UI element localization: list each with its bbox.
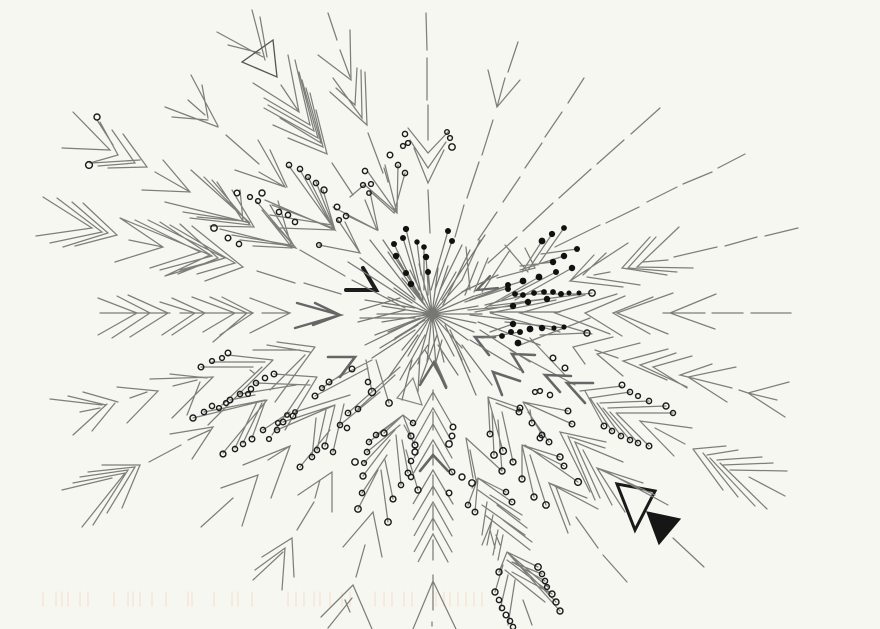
outline triangle lower centre bbox=[397, 378, 422, 405]
spoke: top-left with triangle bbox=[217, 10, 277, 77]
spoke: right lower chevrons bbox=[510, 318, 789, 417]
spoke: lower left chevrons bbox=[201, 446, 382, 629]
spoke: upper left feather bbox=[253, 55, 327, 154]
filled black triangle bbox=[647, 512, 680, 544]
spoke: chevron right of circles bbox=[640, 421, 692, 456]
lower ring bbox=[388, 325, 476, 400]
outline triangle bbox=[242, 40, 277, 77]
dark dots: upper centre bbox=[391, 226, 455, 287]
spoke: bottom right long feather bbox=[468, 478, 560, 625]
spoke: feather with circles, upper bbox=[235, 140, 405, 253]
faint ghost marks along bottom bbox=[43, 592, 482, 606]
spoke: left horizontal bbox=[98, 295, 290, 342]
spoke: right feather with dark dots bbox=[462, 228, 592, 312]
right ring bbox=[462, 275, 565, 385]
dark dots: right lower bbox=[499, 321, 567, 346]
outline black triangle bbox=[617, 484, 655, 530]
open circles: lower centre bbox=[405, 420, 465, 496]
left ring bbox=[358, 298, 425, 358]
spoke: far left chevrons bbox=[36, 197, 117, 247]
spoke: lower right feather with circles bbox=[580, 386, 673, 446]
bold gray chevron right upper bbox=[477, 276, 498, 290]
dashed ray 4 bbox=[555, 154, 745, 247]
tail line and dashes of lower right ray bbox=[576, 517, 704, 582]
dashed ray 5 with chevrons bbox=[570, 227, 798, 287]
dashed ray 3 bbox=[488, 108, 660, 263]
bold gray double arrow bbox=[295, 303, 340, 328]
open circles: bottom feather bbox=[492, 564, 563, 629]
spoke: lower middle feathers with circles bbox=[263, 360, 418, 522]
radial rays bbox=[377, 264, 482, 366]
bold gray chevron lower left bbox=[328, 357, 355, 377]
bold gray chevron lower centre bbox=[420, 455, 448, 471]
spoke: wide left feather bbox=[115, 218, 341, 294]
bold gray chevrons right bbox=[475, 337, 593, 403]
spoke: vertical top with chevrons bbox=[408, 13, 448, 233]
spoke: lower left dense feathers bbox=[193, 342, 317, 453]
lower bold arrow bbox=[420, 362, 446, 388]
spoke: small chevron left bbox=[165, 75, 259, 164]
spoke: right horizontal bbox=[490, 293, 791, 336]
spoke: far right lower feather bbox=[693, 446, 787, 509]
spoke: lower right mid feathers bbox=[466, 397, 668, 533]
spoke: feather towards circles, left bbox=[142, 160, 345, 276]
open circles: upper left bbox=[86, 114, 455, 247]
dashed ray 1 with chevron bbox=[455, 42, 520, 237]
spoke: upper chevrons and dashes bbox=[318, 13, 383, 197]
dark dots: right upper bbox=[505, 225, 582, 309]
upper left converging feather bbox=[348, 229, 485, 308]
dashed ray 2 bbox=[478, 78, 584, 240]
open circles: lower left bbox=[190, 350, 404, 525]
bold black chevron bbox=[346, 268, 376, 290]
spoke: outer lower left chevrons bbox=[50, 374, 213, 462]
spoke: far lower left feather bbox=[62, 465, 140, 527]
open circles: lower right bbox=[465, 290, 676, 515]
central starburst bbox=[348, 229, 565, 400]
spoke: far upper left with circles bbox=[62, 112, 147, 168]
spoke: vertical lower stacked chevrons bbox=[413, 390, 456, 629]
